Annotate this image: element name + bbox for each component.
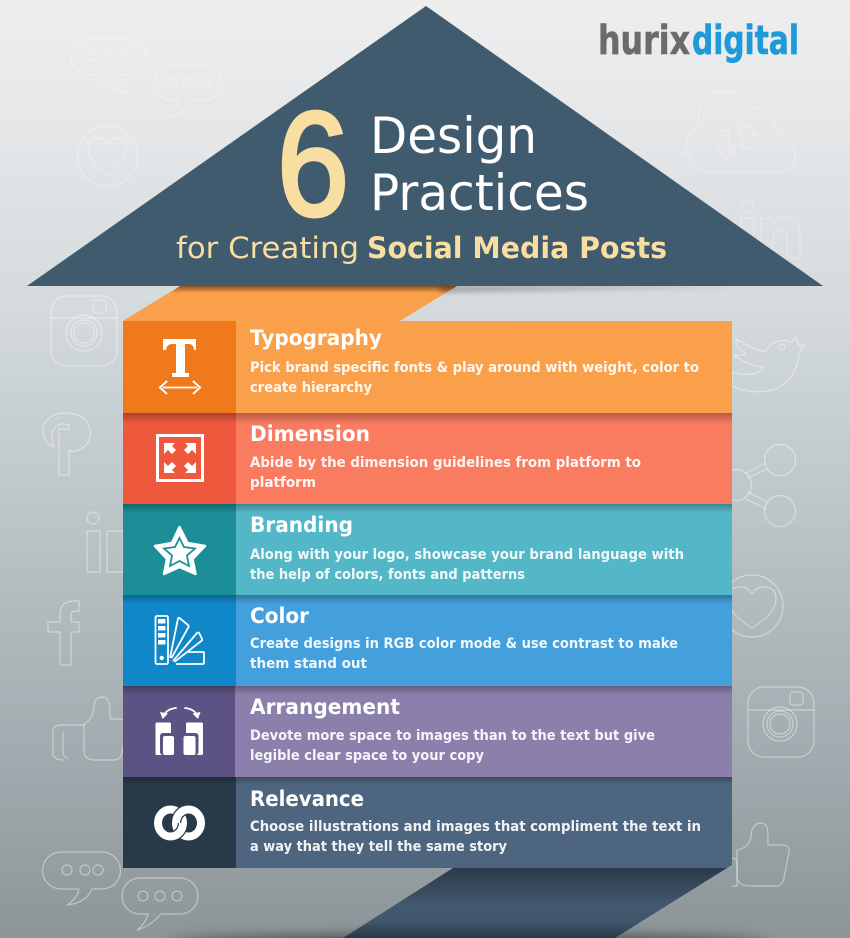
logo: hurix digital: digital xyxy=(692,18,799,64)
heading: Typography: Typography xyxy=(250,326,382,350)
panel: typography xyxy=(123,321,732,413)
heading: Relevance: Relevance xyxy=(250,787,364,811)
panel: branding xyxy=(123,504,732,595)
panel: dimension xyxy=(123,413,732,504)
icon: thumbs up right xyxy=(732,823,789,886)
text: color description: them stand out xyxy=(250,656,367,672)
icon: star xyxy=(155,527,205,574)
icon: color swatch fan xyxy=(156,616,204,664)
panel: relevance xyxy=(123,777,732,868)
text: dimension description: Abide by the dimension guidelines from platform to xyxy=(250,455,641,471)
icon: chat bubble bottom second xyxy=(122,878,198,930)
icon: heart in circle right xyxy=(721,575,783,637)
icon: typography T with arrow xyxy=(160,339,200,394)
icon: chat bubble top left xyxy=(71,39,147,93)
icon: share nodes right xyxy=(720,444,796,526)
icon: arrangement blocks and arrows xyxy=(156,708,203,755)
icon: thumbs up left xyxy=(53,697,127,760)
bottom fold below ribbon xyxy=(170,868,770,938)
icon: cloud upload download xyxy=(686,91,795,172)
panel: arrangement xyxy=(123,686,732,777)
text: branding description: Along with your logo, showcase your brand language with xyxy=(250,547,684,563)
icon: chat bubble bottom left xyxy=(43,852,121,905)
text: typography description: create hierarchy xyxy=(250,380,372,396)
heading: Color: Color xyxy=(250,604,310,628)
text: dimension description: platform xyxy=(250,475,316,491)
text: branding description: the help of colors, fonts and patterns xyxy=(250,567,525,583)
heading: Branding: Branding xyxy=(250,513,353,537)
icon: instagram left xyxy=(51,296,117,366)
icon: instagram right xyxy=(748,687,814,757)
title block xyxy=(176,82,667,265)
text: color description: Create designs in RGB color mode & use contrast to make xyxy=(250,636,678,652)
text: relevance description: a way that they tell the same story xyxy=(250,839,507,855)
numeral 6: 6 xyxy=(277,82,349,247)
icon: chat bubble top second xyxy=(154,65,222,118)
icon: linkedin left xyxy=(87,512,123,572)
text: relevance description: Choose illustrations and images that compliment the text in xyxy=(250,819,701,835)
icon: dimension box with arrows xyxy=(156,434,204,482)
panel: color xyxy=(123,595,732,686)
text: arrangement description: Devote more space to images than to the text but give xyxy=(250,728,655,744)
icon: linkedin top right xyxy=(741,200,800,258)
heading: Design: Design xyxy=(370,107,537,165)
icon: heart in circle top left xyxy=(78,126,138,186)
icon: pinterest left xyxy=(43,413,90,475)
orange folded ribbon under roof xyxy=(123,286,457,321)
icon: interlocked rings xyxy=(158,810,201,836)
icon: twitter bird right xyxy=(732,337,805,392)
logo: hurix digital xyxy=(598,18,799,64)
roof triangle xyxy=(27,6,823,286)
icon: facebook left xyxy=(48,601,79,665)
heading: Dimension: Dimension xyxy=(250,422,370,446)
text: arrangement description: legible clear space to your copy xyxy=(250,748,484,764)
heading: Practices: Practices xyxy=(370,164,589,222)
subtitle bold: Social Media Posts xyxy=(367,231,667,265)
subtitle regular: for Creating xyxy=(176,231,359,265)
logo: hurix digital: hurix xyxy=(598,18,690,64)
heading: Arrangement: Arrangement xyxy=(250,695,400,719)
shadow below roof xyxy=(170,286,750,293)
text: typography description: Pick brand specific fonts & play around with weight, color to xyxy=(250,360,699,376)
